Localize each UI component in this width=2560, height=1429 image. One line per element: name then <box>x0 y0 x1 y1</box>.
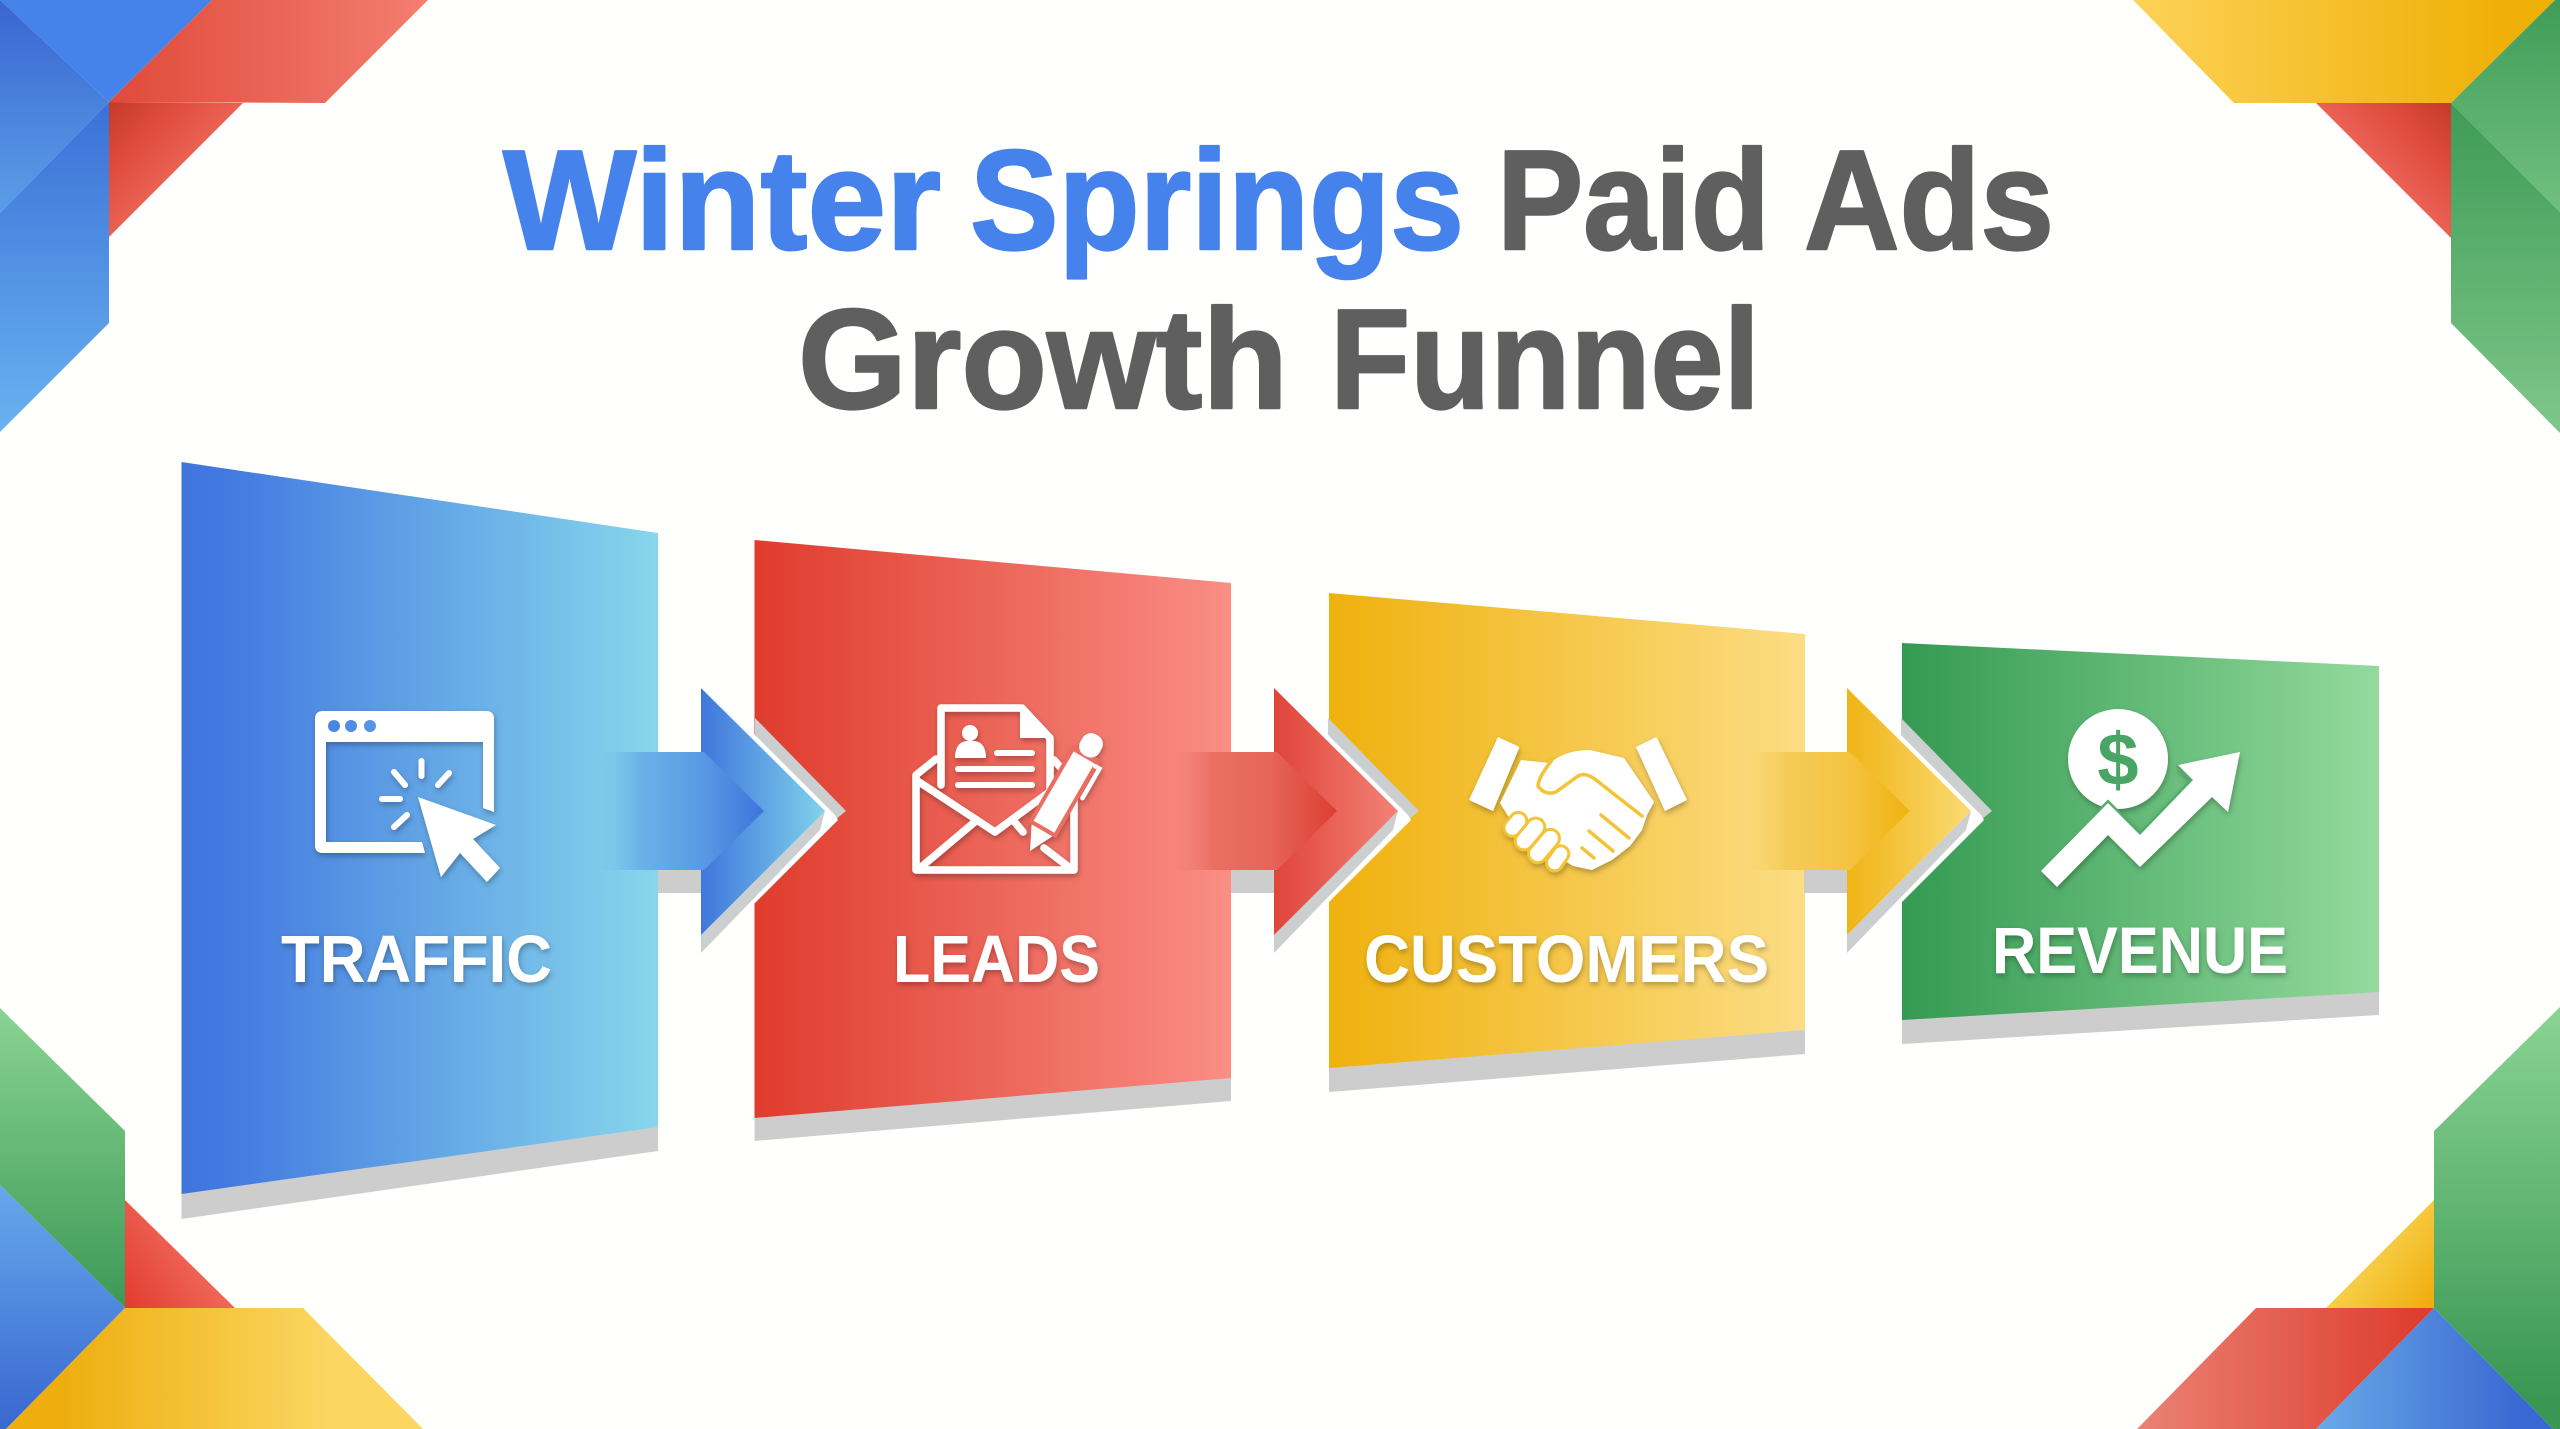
label: customers: CUSTOMERS <box>1364 922 1769 997</box>
icon: dollar coin with rising arrow: $ <box>2097 718 2139 801</box>
icon: dollar coin with rising arrow <box>2041 709 2240 887</box>
arrow: leads to customers <box>1173 680 1419 953</box>
label: traffic: TRAFFIC <box>281 922 552 997</box>
panel: traffic <box>182 462 658 1219</box>
title: Funnel <box>1330 280 1760 439</box>
title: Growth <box>798 280 1288 439</box>
arrow: customers to revenue <box>1746 680 1992 953</box>
label: revenue: REVENUE <box>1992 913 2288 987</box>
corner decoration: top left <box>0 0 428 432</box>
title: Ads <box>1804 121 2054 280</box>
panel: leads <box>754 540 1231 1141</box>
corner decoration: bottom right <box>2137 1007 2560 1429</box>
label: leads: LEADS <box>893 922 1100 997</box>
panel: revenue <box>1902 643 2379 1044</box>
arrow: traffic to leads <box>600 680 846 953</box>
title: Winter <box>503 121 941 280</box>
panel: customers <box>1329 593 1805 1092</box>
corner decoration: bottom left <box>0 1008 423 1429</box>
icon: envelope with letter and pen <box>916 706 1113 870</box>
title <box>503 121 2054 439</box>
title: Springs <box>970 121 1464 280</box>
icon: handshake <box>1469 737 1687 874</box>
icon: browser window with cursor <box>315 711 500 882</box>
title: Paid <box>1497 121 1770 280</box>
corner decoration: top right <box>2133 0 2560 433</box>
